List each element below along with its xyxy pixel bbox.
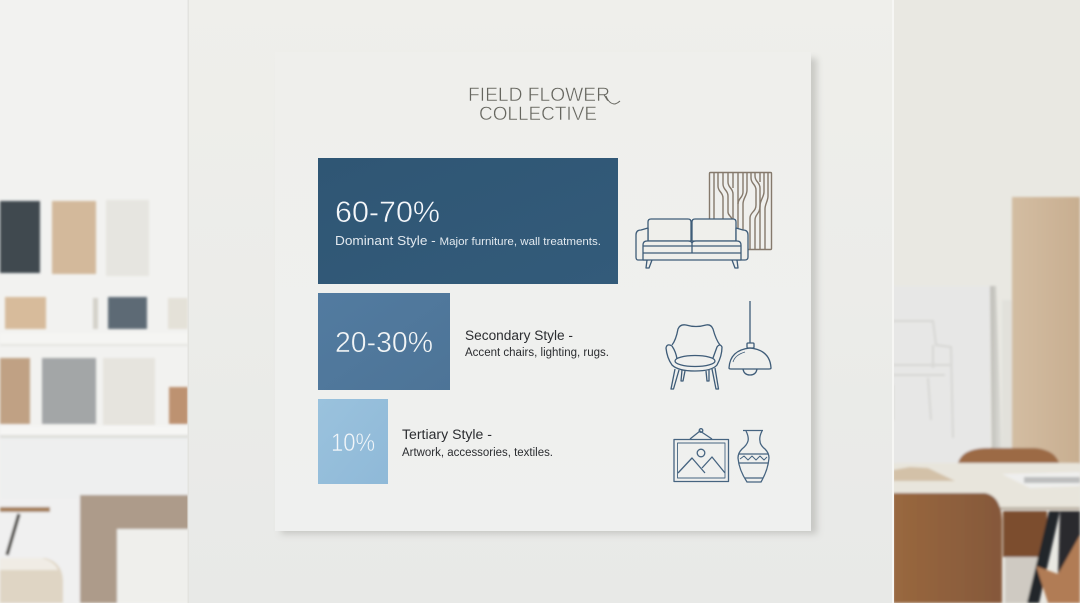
poster shadow — [281, 58, 817, 534]
right background: studio table — [893, 0, 1080, 603]
icon: sofa — [636, 219, 748, 268]
table top — [893, 463, 1080, 509]
left background: material shelves — [0, 0, 189, 603]
tertiary percentage: 10% — [331, 429, 375, 457]
title: FIELD FLOWER — [468, 85, 610, 106]
secondary block — [318, 293, 450, 390]
title: COLLECTIVE — [479, 104, 597, 125]
icon: framed picture — [674, 429, 728, 482]
paper on table — [1002, 472, 1080, 488]
lower shelf — [0, 426, 189, 435]
swatch row two — [5, 297, 188, 329]
secondary percentage: 20-30% — [335, 327, 433, 359]
front chair — [893, 493, 1002, 603]
far chair back — [958, 448, 1059, 463]
tier 3: tertiary style — [318, 399, 553, 484]
tertiary description: Artwork, accessories, textiles. — [402, 447, 553, 459]
icon: pendant lamp — [729, 301, 771, 375]
tertiary block — [318, 399, 388, 484]
side chair — [1036, 535, 1080, 603]
upper shelf — [0, 333, 189, 344]
icon: vase — [738, 430, 769, 482]
tertiary heading: Tertiary Style - — [402, 427, 492, 442]
poster panel — [275, 52, 811, 531]
swatch row three — [0, 358, 188, 425]
bench — [0, 507, 63, 603]
secondary heading: Secondary Style - — [465, 328, 573, 343]
center wall — [188, 0, 894, 603]
dominant description: Dominant Style - Major furniture, wall treatments. — [335, 233, 601, 248]
sketched chair on board — [893, 321, 953, 438]
title — [468, 85, 620, 125]
dominant percentage: 60-70% — [335, 196, 440, 229]
swatch row one — [0, 200, 149, 276]
placemat — [893, 467, 955, 481]
icon: slatted wall panel — [710, 172, 772, 250]
far chair seat — [1003, 511, 1047, 557]
wood door — [1012, 197, 1080, 465]
dominant block — [318, 158, 618, 284]
logo flourish — [606, 96, 620, 104]
leaning board — [893, 286, 1012, 468]
tier 2: secondary style — [318, 293, 609, 390]
tier 1: dominant style — [318, 158, 618, 284]
wood panel and white board — [80, 495, 189, 603]
secondary description: Accent chairs, lighting, rugs. — [465, 347, 609, 359]
icon: armchair — [666, 325, 722, 389]
table legs — [1027, 511, 1060, 603]
